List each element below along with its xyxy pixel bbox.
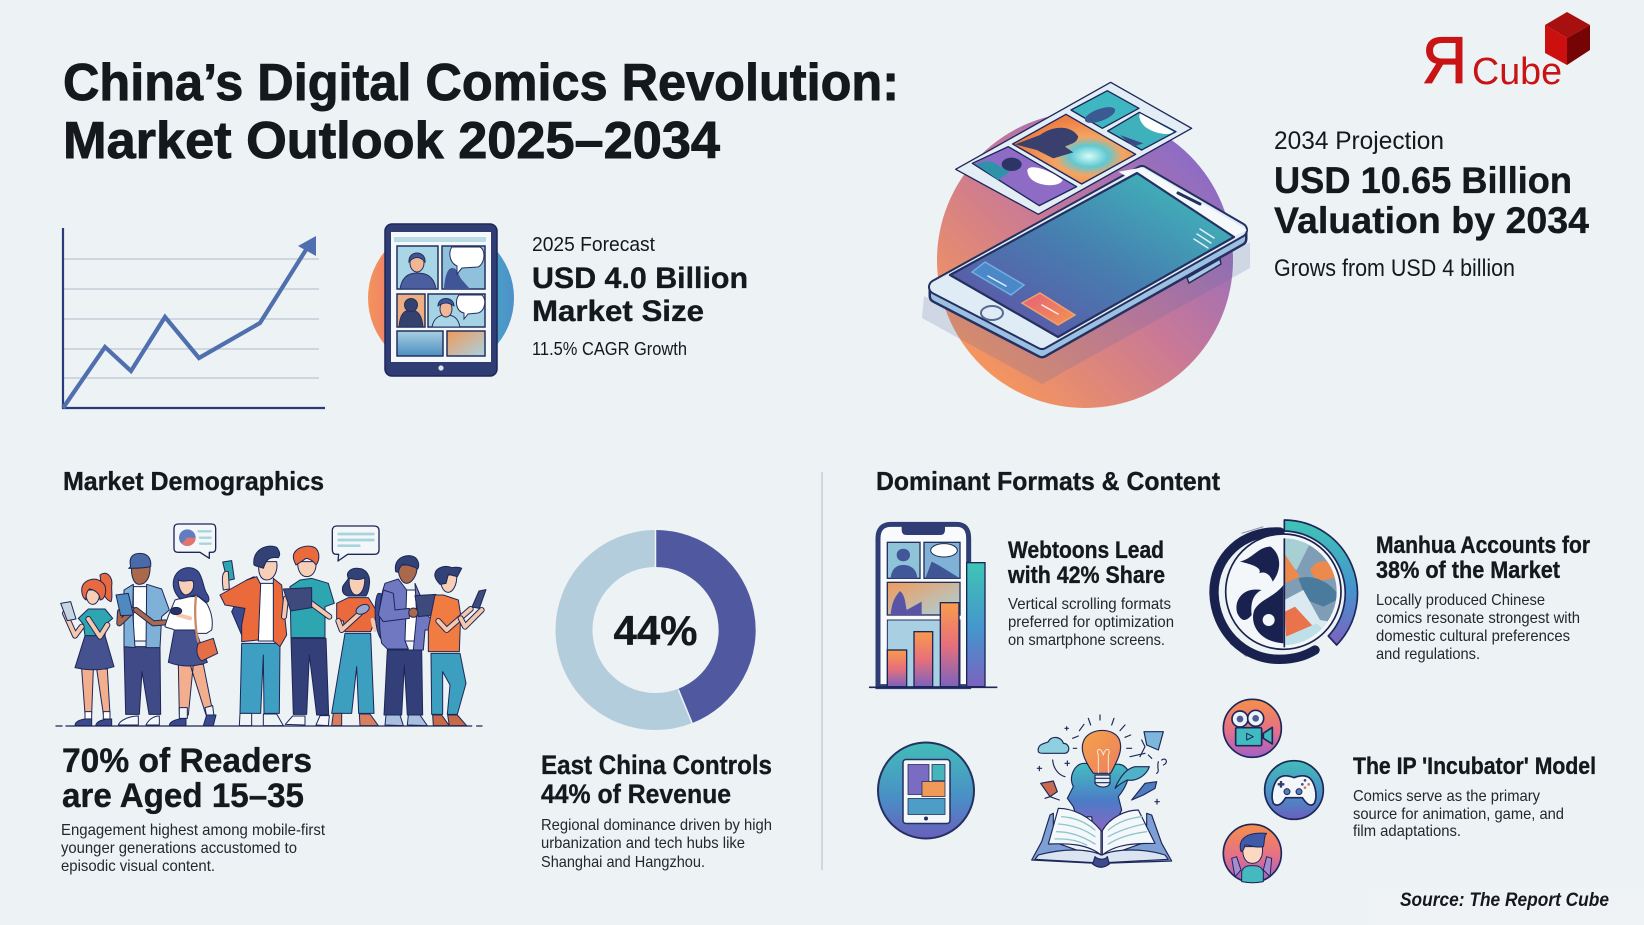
text: 2025 forecast: Market Size: [532, 295, 704, 328]
ground line: [56, 724, 482, 728]
text: IP incubator: [1353, 753, 1596, 840]
icon: tablet in teal circle: [878, 742, 974, 838]
text: 70% of readers: younger generations accustomed to: [61, 840, 297, 857]
title: [63, 54, 899, 170]
illustration: group of young readers with devices: [56, 524, 486, 726]
line chart: [63, 228, 325, 408]
text: manhua: 38% of the Market: [1376, 557, 1560, 584]
person 7: [375, 556, 436, 726]
person 3: [165, 568, 218, 726]
text: 2025 forecast: USD 4.0 Billion: [532, 262, 748, 295]
phone body: [936, 173, 1240, 342]
icon: character: [1223, 824, 1281, 883]
text: manhua: [1376, 532, 1590, 663]
icon: tablet with comic panels: [368, 224, 514, 376]
text: 70% of readers: [61, 742, 326, 875]
icon: film camera: [1223, 699, 1281, 757]
comic strip: [956, 82, 1192, 214]
source credit: [1367, 887, 1644, 925]
source credit: Source: The Report Cube: [1400, 890, 1609, 911]
text: 70% of readers: Engagement highest among mobile-first: [61, 822, 326, 839]
text: 2034 projection: Valuation by 2034: [1274, 200, 1589, 241]
text: webtoons: [1007, 537, 1174, 649]
text: 2034 projection: 2034 Projection: [1274, 127, 1444, 155]
text: manhua: domestic cultural preferences: [1376, 628, 1570, 645]
button blue: [972, 262, 1024, 295]
text: 70% of readers: 70% of Readers: [62, 742, 312, 780]
person 2: [116, 553, 169, 725]
heading: market demographics: Market Demographics: [63, 466, 324, 496]
phone screen: [950, 173, 1234, 337]
text: webtoons: with 42% Share: [1007, 562, 1165, 589]
speech bubble: pie chart: [174, 524, 216, 558]
text: IP incubator: film adaptations.: [1353, 823, 1461, 840]
donut chart: 44% east china: [574, 530, 737, 724]
text: 2034 projection: USD 10.65 Billion: [1274, 160, 1572, 201]
icon: book with head and lightbulb: [1032, 715, 1172, 867]
text: east china: Shanghai and Hangzhou.: [541, 854, 705, 871]
text: east china: East China Controls: [541, 750, 772, 780]
heading: dominant formats: Dominant Formats & Content: [876, 466, 1220, 496]
phone shadow: [922, 242, 1250, 384]
text: IP incubator: Comics serve as the primary: [1353, 788, 1540, 805]
person 6: [332, 568, 378, 726]
logo: RCube: [1422, 12, 1590, 97]
person 5: [283, 546, 334, 726]
speech bubble: text: [332, 526, 379, 561]
icon: game controller: [1265, 761, 1323, 819]
text: east china: Regional dominance driven by high: [541, 817, 772, 834]
button orange: [1022, 293, 1075, 325]
text: 2025 forecast: 11.5% CAGR Growth: [532, 339, 687, 359]
phone side: [936, 230, 1240, 351]
text: manhua: Locally produced Chinese: [1376, 592, 1545, 609]
text: 70% of readers: episodic visual content.: [61, 858, 215, 875]
person 1: [61, 573, 114, 726]
text: manhua: Manhua Accounts for: [1376, 532, 1590, 559]
text: IP incubator: The IP 'Incubator' Model: [1353, 753, 1596, 780]
logo: RCube: Cube: [1472, 51, 1562, 93]
icon: red cube: [1545, 12, 1590, 65]
text: east china: urbanization and tech hubs like: [541, 835, 745, 852]
person 8: [428, 566, 486, 726]
text: 70% of readers: are Aged 15–35: [62, 777, 304, 815]
icons: adaptation circles: [1223, 699, 1323, 883]
text: east china: 44% of Revenue: [541, 779, 731, 809]
text: manhua: and regulations.: [1376, 646, 1480, 663]
text: 2025 forecast: 2025 Forecast: [532, 234, 655, 256]
icon: webtoon phone with bars: [869, 524, 997, 687]
text: webtoons: Webtoons Lead: [1008, 537, 1164, 564]
text: 2034 projection: [1274, 127, 1589, 282]
text: 2034 projection: Grows from USD 4 billion: [1274, 255, 1515, 282]
logo: RCube: Я: [1422, 23, 1467, 97]
icon: big smartphone with floating comic strip: [922, 82, 1250, 408]
text: webtoons: preferred for optimization: [1008, 614, 1174, 631]
text: 2025 forecast: [532, 234, 748, 359]
donut chart: 44% east china: 44%: [613, 607, 698, 654]
icon: yin yang manhua with share arc: [1214, 520, 1357, 659]
person 4: [220, 546, 287, 726]
text: east china: [541, 750, 772, 871]
text: manhua: comics resonate strongest with: [1376, 610, 1580, 627]
title: China’s Digital Comics Revolution:: [63, 54, 899, 112]
text: IP incubator: source for animation, game, and: [1353, 806, 1564, 823]
title: Market Outlook 2025–2034: [63, 112, 720, 170]
text: webtoons: on smartphone screens.: [1008, 632, 1165, 649]
text: webtoons: Vertical scrolling formats: [1008, 596, 1171, 613]
